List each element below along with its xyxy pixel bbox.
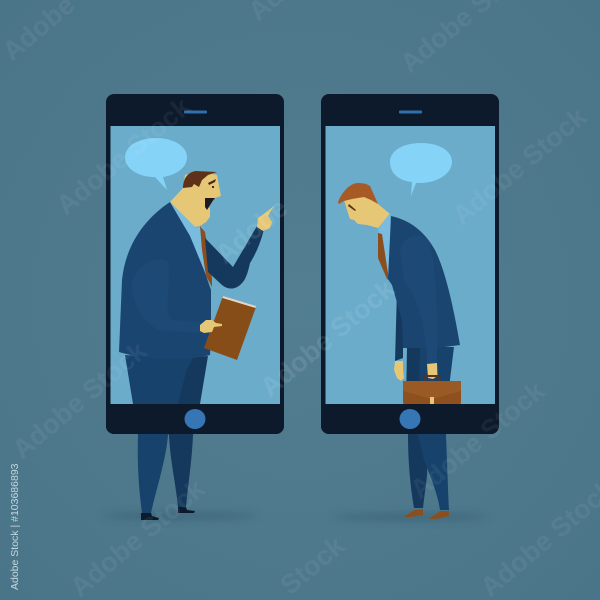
boss near leg xyxy=(125,355,193,513)
employee far hand xyxy=(394,361,404,381)
employee near hand xyxy=(427,363,438,379)
boss mouth xyxy=(205,198,215,210)
employee back leg xyxy=(406,348,432,508)
speech bubble: boss xyxy=(125,138,187,190)
right phone screen xyxy=(326,126,495,404)
employee shoes xyxy=(404,509,449,519)
employee hair xyxy=(338,183,378,204)
boss neck and face xyxy=(170,171,221,227)
right phone bottom bar xyxy=(321,404,499,434)
left phone xyxy=(106,94,284,434)
stock id caption: Adobe Stock | #103686893 xyxy=(9,463,21,590)
boss book pages xyxy=(222,296,256,308)
boss hand on book xyxy=(200,320,222,333)
watermarks: Adobe xyxy=(210,193,293,270)
employee jacket sleeve xyxy=(400,236,437,364)
employee neck and face xyxy=(344,190,390,228)
boss eye and brow xyxy=(208,179,216,188)
watermarks: Adobe Stock xyxy=(447,101,593,231)
boss book xyxy=(204,296,256,360)
left phone bottom bar xyxy=(106,404,284,434)
boss jacket sleeve xyxy=(132,260,203,333)
boss shoes xyxy=(141,507,195,520)
boss far leg xyxy=(160,356,208,507)
watermarks: Adobe Stock xyxy=(255,273,401,403)
speech bubble: employee xyxy=(390,143,452,196)
employee brow xyxy=(348,204,356,211)
employee tie xyxy=(378,233,389,280)
watermarks: Adobe Stock xyxy=(51,91,197,221)
right phone speaker xyxy=(399,110,422,114)
employee jacket xyxy=(388,216,460,348)
left phone speaker xyxy=(184,110,207,114)
boss jacket xyxy=(119,202,211,359)
boss hair xyxy=(183,171,217,188)
employee figure xyxy=(338,183,461,519)
left phone screen xyxy=(110,126,280,404)
right phone home button xyxy=(400,409,420,429)
boss pointing hand xyxy=(257,206,274,231)
boss pointing arm xyxy=(205,226,264,289)
employee front leg xyxy=(418,347,454,510)
boss tie xyxy=(200,226,212,287)
watermarks: Adobe Stock xyxy=(405,375,551,505)
watermarks: Adobe Stock xyxy=(7,335,153,465)
boss shirt xyxy=(170,202,206,280)
boss figure xyxy=(119,171,274,520)
watermarks: Adobe Stock xyxy=(65,473,211,600)
employee shirt xyxy=(378,213,392,275)
employee far arm xyxy=(390,260,403,361)
employee briefcase xyxy=(403,375,461,404)
right phone xyxy=(321,94,499,434)
watermarks: Stock xyxy=(275,530,351,600)
left phone home button xyxy=(184,409,206,429)
ground shadows xyxy=(102,512,488,520)
